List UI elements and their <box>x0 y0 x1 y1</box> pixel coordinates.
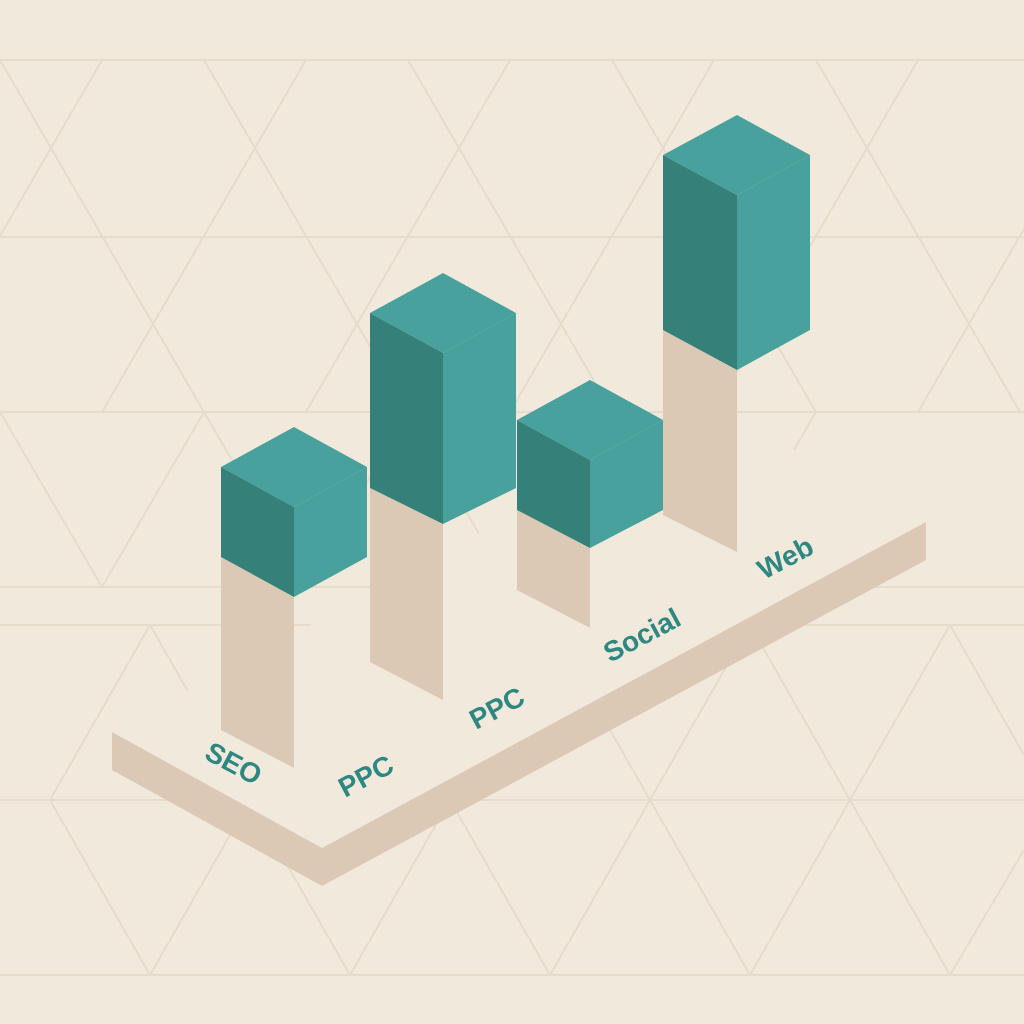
labels <box>200 530 819 803</box>
labels: PPC <box>333 749 399 803</box>
bar: Social <box>517 380 663 628</box>
labels: SEO <box>200 736 267 791</box>
labels: Social <box>598 602 686 668</box>
bar: PPC 1 <box>370 273 516 700</box>
bar: Web <box>663 115 810 552</box>
labels: PPC <box>464 681 530 735</box>
platform <box>112 406 926 886</box>
labels: Web <box>752 530 819 585</box>
bar: SEO <box>221 427 367 768</box>
